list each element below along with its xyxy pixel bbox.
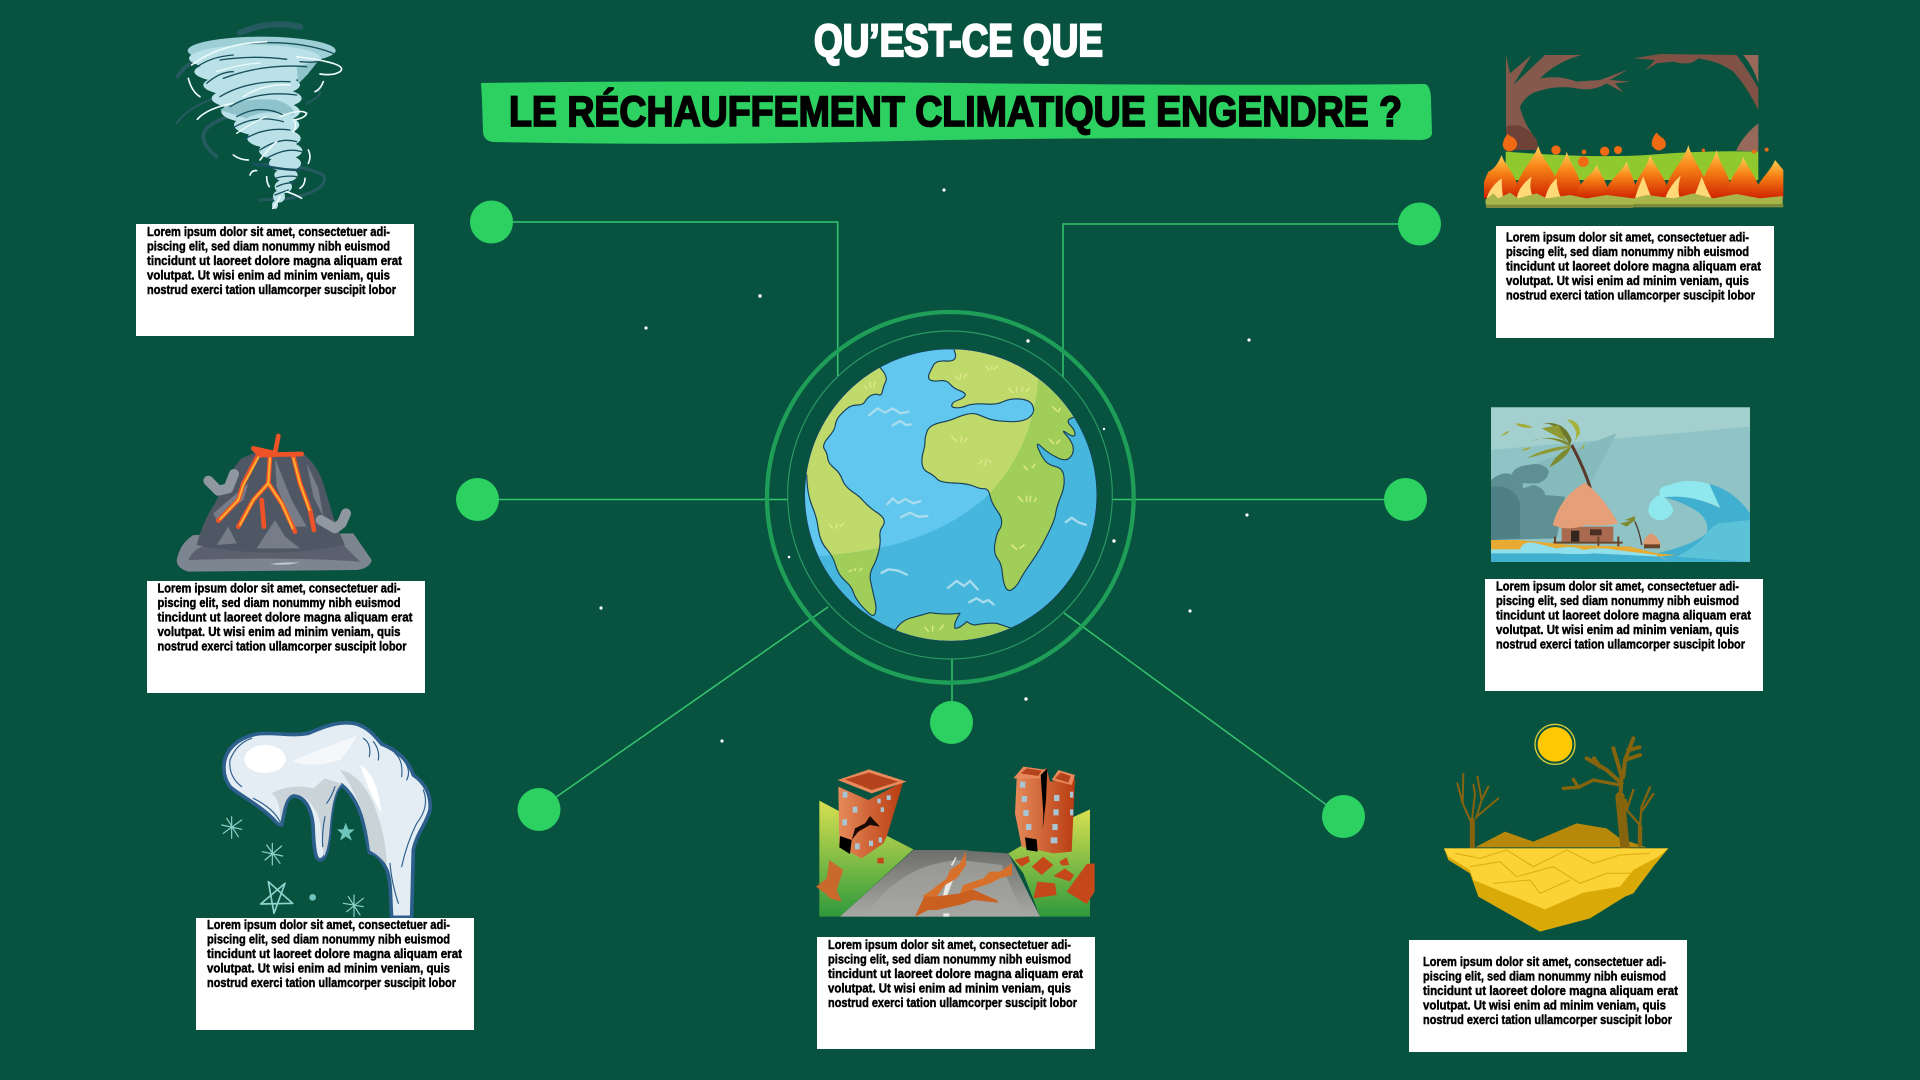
beach and water <box>1491 540 1677 557</box>
background stars <box>599 188 1251 743</box>
text box: drought: tincidunt ut laoreet dolore magna aliquam erat <box>1423 984 1679 998</box>
text box: forest fire: nostrud exerci tation ullamcorper suscipit lobor <box>1506 288 1755 302</box>
road <box>840 850 1040 917</box>
volcano cone <box>197 453 345 552</box>
text box: forest fire: Lorem ipsum dolor sit amet, consectetuer adi- <box>1506 230 1749 244</box>
text box: tornado <box>136 224 414 336</box>
left building <box>838 769 907 858</box>
title line two: LE RÉCHAUFFEMENT CLIMATIQUE ENGENDRE ? <box>509 88 1402 136</box>
snow contour lines <box>230 738 426 903</box>
stormy sky <box>1491 407 1750 562</box>
island rock <box>1444 848 1668 932</box>
broken stump <box>816 860 843 902</box>
white swirl highlights <box>188 42 342 208</box>
text box: tornado: volutpat. Ut wisi enim ad minim veniam, quis <box>147 268 390 282</box>
hut <box>1553 483 1661 550</box>
text box: volcano: piscing elit, sed diam nonummy nibh euismod <box>158 596 400 610</box>
fire embers <box>1503 133 1769 167</box>
text box: tsunami: nostrud exerci tation ullamcorper suscipit lobor <box>1496 638 1745 652</box>
connector lines <box>478 222 1419 817</box>
text box: ice and snow: Lorem ipsum dolor sit amet, consectetuer adi- <box>207 918 450 932</box>
rock highlights <box>213 458 323 548</box>
green hills <box>819 801 913 917</box>
giant wave <box>1657 484 1750 562</box>
text box: drought: volutpat. Ut wisi enim ad minim veniam, quis <box>1423 998 1666 1012</box>
illustration: tsunami <box>1491 407 1750 562</box>
text box: drought: piscing elit, sed diam nonummy nibh euismod <box>1423 970 1666 984</box>
text box: earthquake: volutpat. Ut wisi enim ad minim veniam, quis <box>828 982 1071 996</box>
ocean waves <box>868 408 1087 605</box>
globe <box>804 348 1097 642</box>
text box: volcano: volutpat. Ut wisi enim ad minim veniam, quis <box>158 625 401 639</box>
title line one: QU’EST-CE QUE <box>814 15 1103 66</box>
funnel <box>188 37 336 209</box>
text box: earthquake: Lorem ipsum dolor sit amet, consectetuer adi- <box>828 938 1071 952</box>
text box: tsunami: volutpat. Ut wisi enim ad minim veniam, quis <box>1496 623 1739 637</box>
storm trees <box>1491 464 1565 540</box>
snow shading <box>272 770 387 865</box>
text box: volcano: nostrud exerci tation ullamcorper suscipit lobor <box>158 640 407 654</box>
text box: tornado: Lorem ipsum dolor sit amet, consectetuer adi- <box>147 225 390 239</box>
snow highlights <box>244 736 382 813</box>
text box: volcano <box>147 581 425 693</box>
cracks <box>1455 850 1650 893</box>
distant hills <box>1475 823 1647 847</box>
illustration: drought <box>1444 724 1668 932</box>
text box: ice and snow <box>196 918 474 1030</box>
text box: tsunami: tincidunt ut laoreet dolore magna aliquam erat <box>1496 608 1752 622</box>
text box: ice and snow: nostrud exerci tation ullamcorper suscipit lobor <box>207 976 456 990</box>
inner ring <box>788 331 1112 659</box>
text box: forest fire: tincidunt ut laoreet dolore magna aliquam erat <box>1506 260 1762 274</box>
text box: ice and snow: piscing elit, sed diam nonummy nibh euismod <box>207 932 450 946</box>
node dots <box>456 200 1441 838</box>
central globe with rings <box>767 312 1134 683</box>
text box: earthquake: tincidunt ut laoreet dolore magna aliquam erat <box>828 967 1084 981</box>
road cracks <box>915 852 1012 917</box>
illustration: earthquake <box>816 767 1095 917</box>
text box: forest fire <box>1496 226 1774 338</box>
rubble <box>877 856 1095 904</box>
text box: drought: nostrud exerci tation ullamcorper suscipit lobor <box>1423 1013 1672 1027</box>
text box: drought <box>1409 940 1687 1052</box>
text box: earthquake: nostrud exerci tation ullamcorper suscipit lobor <box>828 996 1077 1010</box>
outer ring <box>767 312 1134 683</box>
star and dot <box>309 823 355 901</box>
grass strip <box>1485 193 1783 207</box>
right building <box>1013 767 1075 853</box>
lava flows <box>218 436 314 532</box>
text box: ice and snow: volutpat. Ut wisi enim ad minim veniam, quis <box>207 962 450 976</box>
text box: volcano: Lorem ipsum dolor sit amet, consectetuer adi- <box>158 582 400 596</box>
illustration: forest fire <box>1484 54 1783 208</box>
inner flames <box>1487 176 1712 198</box>
funnel shading <box>220 58 320 118</box>
island top <box>1444 848 1668 909</box>
dark swirls <box>177 24 324 200</box>
text box: drought: Lorem ipsum dolor sit amet, consectetuer adi- <box>1423 955 1666 969</box>
funnel streaks <box>195 43 333 195</box>
text box: ice and snow: tincidunt ut laoreet dolore magna aliquam erat <box>207 947 463 961</box>
text box: earthquake <box>817 937 1095 1049</box>
snow mass <box>224 723 430 917</box>
flames <box>1484 145 1783 198</box>
text box: forest fire: volutpat. Ut wisi enim ad minim veniam, quis <box>1506 274 1749 288</box>
text box: tornado: piscing elit, sed diam nonummy nibh euismod <box>147 240 390 254</box>
snowflakes and stars <box>222 817 363 917</box>
tree right <box>1633 54 1758 110</box>
illustration: volcano <box>177 436 372 572</box>
text box: volcano: tincidunt ut laoreet dolore magna aliquam erat <box>158 610 413 624</box>
illustration: ice and snow <box>222 723 430 917</box>
text box: tsunami: Lorem ipsum dolor sit amet, consectetuer adi- <box>1496 580 1739 594</box>
smoke <box>208 474 346 528</box>
text box: forest fire: piscing elit, sed diam nonummy nibh euismod <box>1506 245 1749 259</box>
sun <box>1535 724 1575 764</box>
text box: tsunami <box>1485 579 1763 691</box>
text box: tornado: tincidunt ut laoreet dolore magna aliquam erat <box>147 254 403 268</box>
burning ground <box>1506 151 1758 180</box>
illustration: tornado <box>177 24 342 209</box>
palm tree <box>1501 419 1591 489</box>
dead trees <box>1457 738 1653 851</box>
text box: tornado: nostrud exerci tation ullamcorper suscipit lobor <box>147 283 396 297</box>
text box: earthquake: piscing elit, sed diam nonummy nibh euismod <box>828 952 1071 966</box>
volcano base <box>177 533 372 572</box>
tree left <box>1506 55 1631 150</box>
title banner <box>481 82 1432 144</box>
land grass marks <box>829 366 1060 631</box>
text box: tsunami: piscing elit, sed diam nonummy nibh euismod <box>1496 594 1739 608</box>
